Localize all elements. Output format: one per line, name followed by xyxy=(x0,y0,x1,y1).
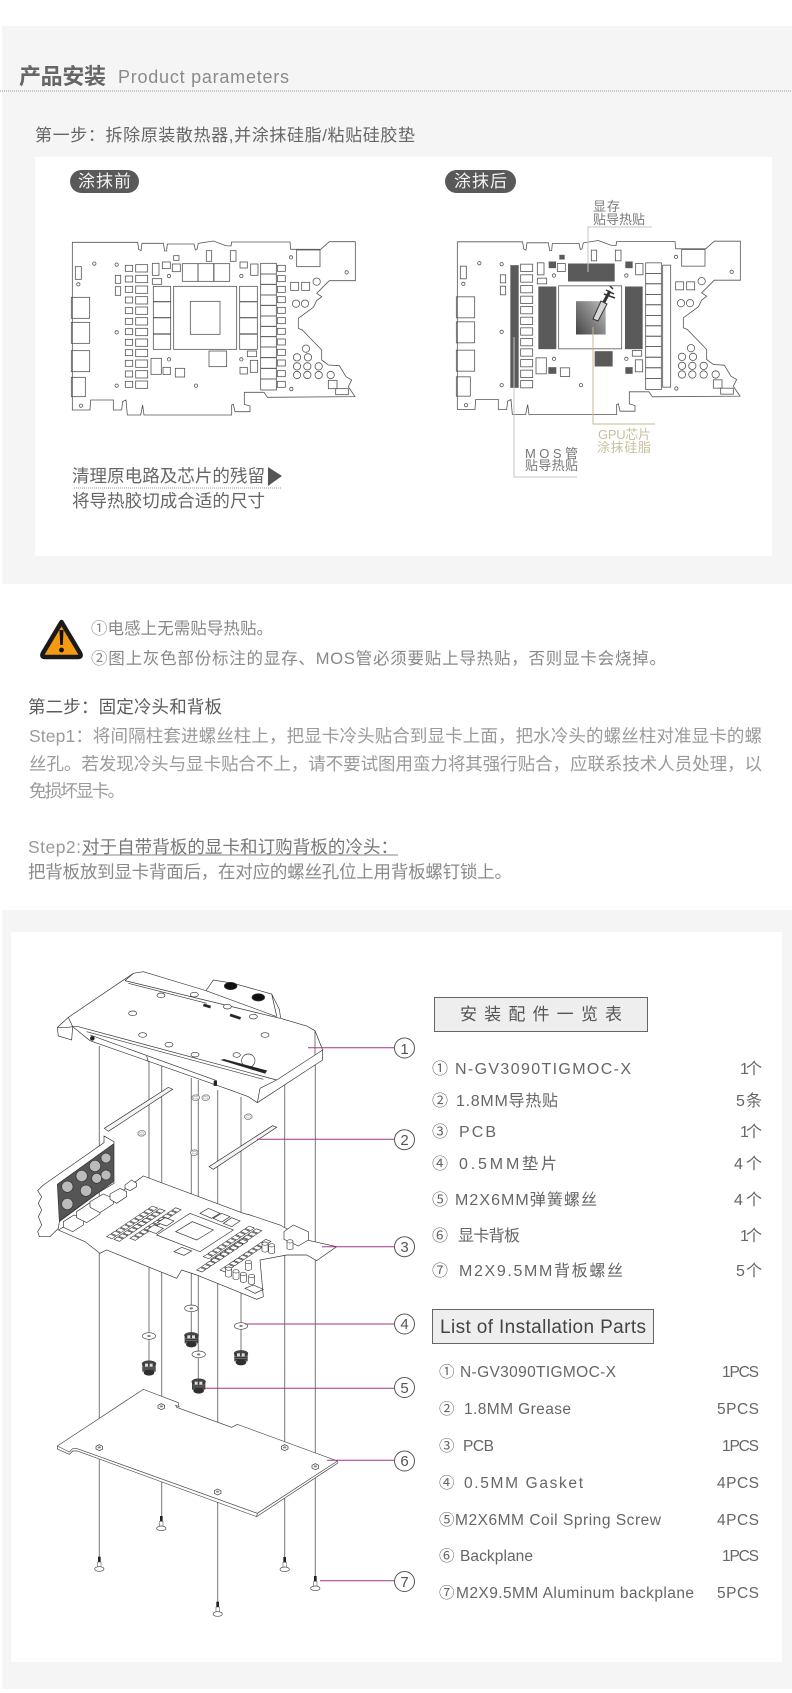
heading: parts list English xyxy=(432,1310,654,1344)
callout: part 7 xyxy=(320,1572,414,1592)
row 4: ④ xyxy=(432,1155,448,1173)
row 3: 1个 xyxy=(740,1123,762,1141)
row 7: 5个 xyxy=(736,1262,762,1280)
row 1 xyxy=(439,1363,759,1381)
callout: part 3 xyxy=(322,1237,414,1257)
row 5: 4个 xyxy=(734,1191,762,1209)
callout: GPU grease: GPU芯片 xyxy=(598,427,651,442)
panel: bottom gray section xyxy=(2,910,792,1689)
callout: MOS thermal pad: MOS管 xyxy=(525,446,578,461)
row 1: N-GV3090TIGMOC-X xyxy=(460,1364,617,1381)
text: step 1 paragraph: 丝孔。若发现冷头与显卡贴合不上，请不要试图用蛮力将其强行贴合，应联系技术人员处理，以 xyxy=(29,754,762,774)
pill: before applying: 涂抹前 xyxy=(78,172,131,191)
row 2: 1.8MM导热贴 xyxy=(456,1092,558,1110)
row 5: ⑤ xyxy=(432,1191,448,1209)
text: step 2 paragraph: 把背板放到显卡背面后，在对应的螺丝孔位上用背板螺钉锁上。 xyxy=(28,862,512,882)
callout: part 3: 3 xyxy=(400,1239,409,1256)
row 4: 4个 xyxy=(734,1155,762,1173)
guide lines xyxy=(99,1046,315,1602)
list: parts in English xyxy=(439,1363,759,1602)
row 1 xyxy=(432,1060,762,1078)
row 6 xyxy=(432,1227,762,1245)
callout: part 4 xyxy=(245,1314,414,1334)
row 2 xyxy=(432,1092,762,1110)
callout: GPU grease xyxy=(593,327,655,455)
callout: part 1 xyxy=(308,1038,414,1058)
row 5: M2X6MM Coil Spring Screw xyxy=(455,1512,662,1529)
row 1: 1个 xyxy=(740,1060,762,1078)
row 4: ④ xyxy=(439,1474,455,1492)
row 6: ⑥ xyxy=(439,1547,455,1565)
text: step 2 paragraph: 对于自带背板的显卡和订购背板的冷头： xyxy=(82,837,398,857)
icon: warning triangle xyxy=(42,622,81,657)
callout: part 7: 7 xyxy=(400,1574,409,1591)
callout: part 4: 4 xyxy=(400,1316,409,1333)
row 1: N-GV3090TIGMOC-X xyxy=(455,1061,631,1078)
callout: part 5 xyxy=(205,1378,414,1398)
heading: step two: 第二步：固定冷头和背板 xyxy=(28,697,222,717)
text: clean residue note: 清理原电路及芯片的残留 xyxy=(72,466,265,486)
diagram: PCB after applying xyxy=(456,240,740,414)
text: step 1 paragraph: Step1：将间隔柱套进螺丝柱上，把显卡冷头贴合到显卡上面，把水冷头的螺丝柱对准显卡的螺 xyxy=(29,726,762,746)
row 4: 4PCS xyxy=(717,1475,759,1492)
pill: after applying xyxy=(445,170,516,193)
part: thermal pad strips xyxy=(104,1087,277,1169)
text: step one heading: 第一步：拆除原装散热器,并涂抹硅脂/粘贴硅胶垫 xyxy=(35,126,415,145)
callout: memory thermal pad: 贴导热贴 xyxy=(593,212,645,227)
row 4 xyxy=(439,1474,759,1492)
row 2: 5条 xyxy=(736,1092,762,1110)
icon: grease syringe xyxy=(593,286,615,321)
row 7: ⑦ xyxy=(432,1262,448,1280)
row 5: M2X6MM弹簧螺丝 xyxy=(455,1190,597,1209)
part: PCB and bracket xyxy=(38,1136,337,1299)
row 2: 1.8MM Grease xyxy=(464,1401,571,1418)
row 4: 0.5MM垫片 xyxy=(459,1155,557,1173)
list: parts in Chinese xyxy=(432,1060,762,1280)
callout: part 2 xyxy=(257,1130,414,1150)
text: clean residue note: 将导热胶切成合适的尺寸 xyxy=(72,491,265,511)
row 7: 5PCS xyxy=(717,1585,759,1602)
text: step 2 paragraph xyxy=(28,837,512,882)
panel: white parts card xyxy=(11,932,782,1662)
row 6: Backplane xyxy=(460,1548,533,1565)
row 5: ⑤ xyxy=(439,1511,455,1529)
row 1: ① xyxy=(439,1363,455,1381)
callout: part 2: 2 xyxy=(400,1132,409,1149)
row 4 xyxy=(432,1155,762,1173)
diagram: exploded assembly xyxy=(38,972,337,1616)
row 2 xyxy=(439,1400,759,1418)
row 3: 1PCS xyxy=(722,1438,759,1455)
row 6: ⑥ xyxy=(432,1227,448,1245)
row 1: 1PCS xyxy=(722,1364,759,1381)
diagram: PCB before applying xyxy=(71,241,355,415)
part: gaskets and spring screws xyxy=(142,1305,248,1394)
panel: top gray section xyxy=(2,26,792,584)
row 7 xyxy=(432,1262,762,1280)
row 2: ② xyxy=(439,1400,455,1418)
panel: white step one card xyxy=(35,157,772,556)
row 5: 4PCS xyxy=(717,1512,759,1529)
row 6: 显卡背板 xyxy=(458,1227,520,1245)
heading: parts list Chinese xyxy=(434,998,648,1032)
text: step 2 paragraph: Step2: xyxy=(28,837,81,857)
row 7: M2X9.5MM Aluminum backplane xyxy=(456,1585,694,1602)
pill: before applying xyxy=(70,170,139,193)
row 2: 5PCS xyxy=(717,1401,759,1418)
heading: product installation: Product parameters xyxy=(118,67,289,87)
callout: MOS thermal pad xyxy=(514,337,578,477)
row 2: ② xyxy=(432,1092,448,1110)
row 5 xyxy=(439,1511,759,1529)
heading: parts list Chinese: 安装配件一览表 xyxy=(460,1005,622,1024)
row 3 xyxy=(439,1437,759,1455)
text: warning notes: ②图上灰色部份标注的显存、MOS管必须要贴上导热贴，否则显卡会烧掉。 xyxy=(91,649,666,668)
row 7: ⑦ xyxy=(439,1584,455,1602)
thermal pads: dark areas xyxy=(510,255,643,388)
row 6: 1PCS xyxy=(722,1548,759,1565)
text: step 1 paragraph: 免损坏显卡。 xyxy=(29,781,125,801)
heading: product installation: 产品安装 xyxy=(19,64,106,89)
callout: memory thermal pad: 显存 xyxy=(593,199,620,214)
row 7: M2X9.5MM背板螺丝 xyxy=(459,1262,623,1280)
row 3: PCB xyxy=(463,1438,494,1455)
part: backplate screws xyxy=(95,1516,320,1616)
callout: part 6 xyxy=(327,1451,414,1471)
row 3: ③ xyxy=(439,1437,455,1455)
part: backplate xyxy=(57,1389,337,1517)
callout: part 1: 1 xyxy=(400,1041,409,1058)
row 3: PCB xyxy=(459,1124,496,1141)
row 1: ① xyxy=(432,1060,448,1078)
callout: MOS thermal pad: 贴导热贴 xyxy=(525,458,578,473)
heading: product installation xyxy=(19,64,289,89)
text: step 1 paragraph xyxy=(29,726,762,801)
text: warning notes: ①电感上无需贴导热贴。 xyxy=(91,619,273,638)
row 4: 0.5MM Gasket xyxy=(464,1475,584,1492)
row 3 xyxy=(432,1123,762,1141)
callout: memory thermal pad xyxy=(588,199,652,272)
row 5 xyxy=(432,1190,762,1209)
callout: part 6: 6 xyxy=(400,1453,409,1470)
pill: after applying: 涂抹后 xyxy=(454,172,507,191)
callout: part 5: 5 xyxy=(400,1380,409,1397)
text: clean residue note xyxy=(72,466,282,511)
heading: parts list English: List of Installation Parts xyxy=(440,1317,646,1338)
text: warning notes xyxy=(91,619,666,668)
callout: GPU grease: 涂抹硅脂 xyxy=(597,440,651,455)
part: cooling block xyxy=(57,972,323,1103)
row 6: 1个 xyxy=(740,1227,762,1245)
row 3: ③ xyxy=(432,1123,448,1141)
row 6 xyxy=(439,1547,759,1565)
